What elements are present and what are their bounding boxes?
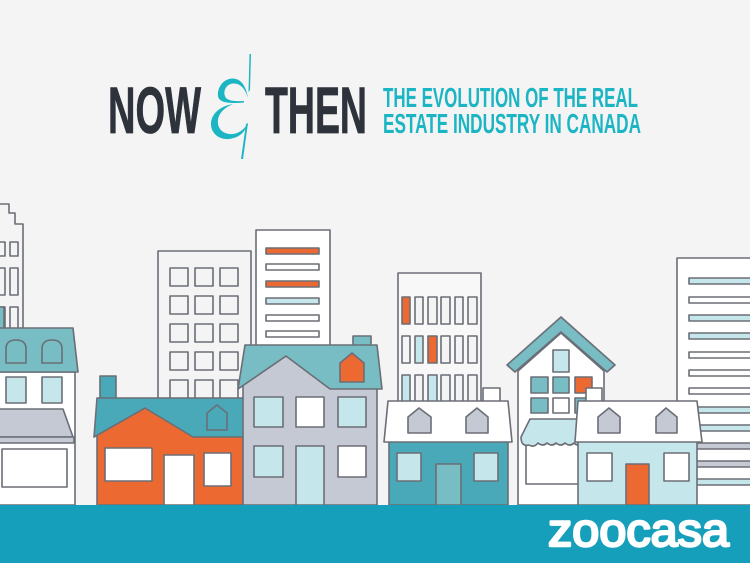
house: grey two-storey	[238, 336, 382, 505]
building: striped white tower	[256, 230, 330, 350]
house: orange bungalow	[94, 376, 250, 505]
house: pale blue cottage	[575, 388, 702, 505]
building: left shop house	[0, 307, 78, 505]
building: right striped tower	[677, 258, 750, 505]
subtitle	[383, 82, 641, 139]
title word: then: THEN	[265, 73, 367, 147]
title word: now: NOW	[108, 73, 201, 147]
skyline illustration	[0, 204, 750, 505]
icon: ampersand	[211, 54, 251, 159]
house: peaked shop house	[507, 317, 615, 505]
logo: zoocasa: zoocasa	[548, 504, 729, 556]
house: teal cottage	[384, 388, 512, 505]
building: narrow-window tower	[398, 273, 481, 403]
building: far-left stepped tower	[0, 204, 23, 330]
title: now & then	[108, 54, 367, 159]
building: grid office tower	[158, 251, 251, 401]
ground band	[0, 505, 750, 563]
